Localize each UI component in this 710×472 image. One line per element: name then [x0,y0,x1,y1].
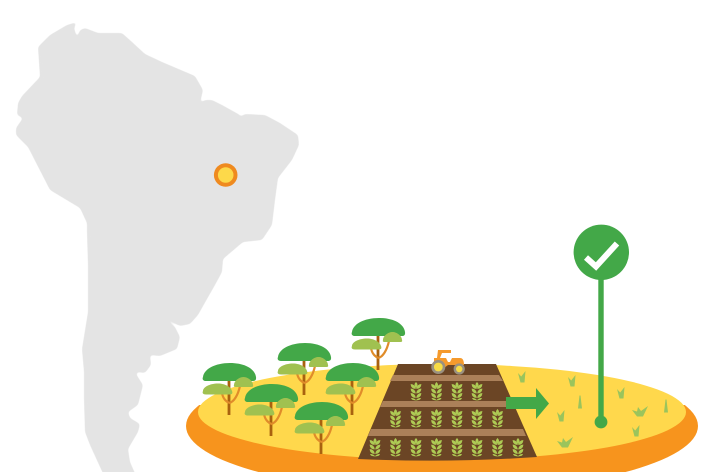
map: South America [16,22,299,472]
wheat row 3 [370,438,523,456]
furrow band 3 [368,429,526,436]
pin head [574,225,629,280]
furrow band 1 [390,375,503,381]
pin base [595,416,607,428]
map marker: location [214,163,238,187]
furrow band 2 [380,401,514,407]
tree: lower left [245,384,298,436]
soil [358,364,537,461]
grass tufts [518,371,668,448]
icon: check mark [586,244,617,266]
arrow: to the right [506,388,549,419]
icon: tractor [431,350,465,375]
tree: top middle [278,343,331,395]
crop field [358,364,537,461]
tree: bottom [295,402,348,454]
wheat row 2 [390,410,502,427]
platform: yellow land [198,364,686,460]
platform: orange base [186,405,698,472]
tree: left [203,363,256,415]
pin stem [598,270,604,422]
tree: right of centre [326,363,379,415]
wheat row 1 [411,382,482,400]
tree: top right [352,318,405,370]
verification pin [574,225,629,428]
